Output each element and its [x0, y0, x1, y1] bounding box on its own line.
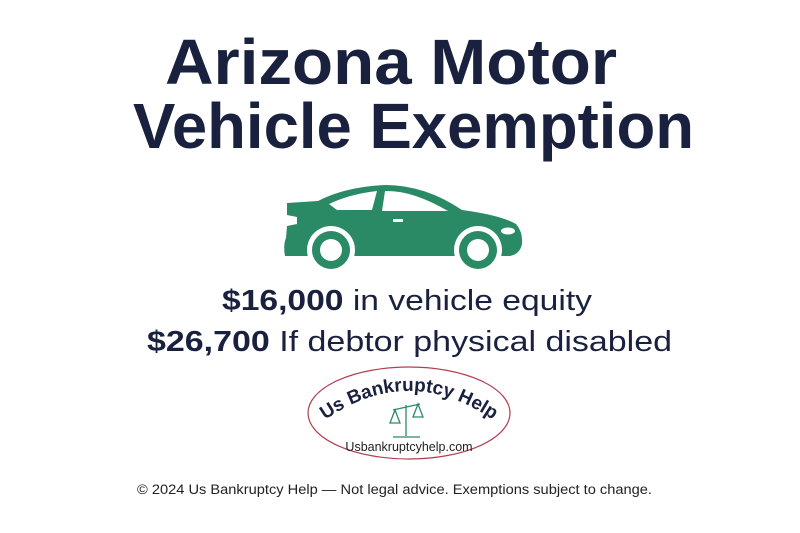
title: Vehicle Exemption [133, 90, 694, 162]
text: equity amounts: $26,700 If debtor physical disabled [147, 326, 672, 358]
title: Arizona Motor [165, 26, 617, 98]
logo: Us Bankruptcy Help [307, 366, 511, 460]
icon: scales [390, 404, 423, 437]
icon: car [284, 185, 522, 274]
logo: Us Bankruptcy Help: Us Bankruptcy Help [319, 379, 496, 419]
text: equity amounts [147, 285, 672, 358]
text: equity amounts: $16,000 in vehicle equity [222, 285, 593, 317]
title [133, 26, 694, 162]
footer: © 2024 Us Bankruptcy Help — Not legal advice. Exemptions subject to change. [137, 482, 652, 497]
logo: Us Bankruptcy Help: Usbankruptcyhelp.com [345, 440, 473, 454]
